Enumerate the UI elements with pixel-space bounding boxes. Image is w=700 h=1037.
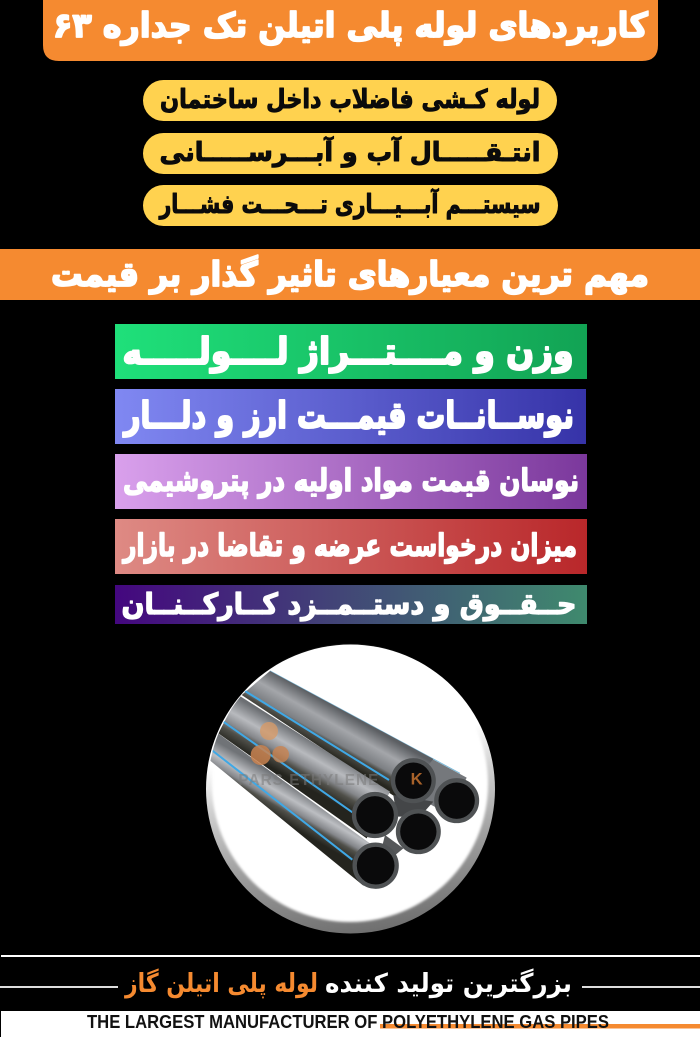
pipes bundle — [209, 671, 477, 887]
watermark — [238, 722, 423, 789]
title banner — [43, 0, 658, 61]
footer left rule — [0, 986, 118, 988]
pill: water transfer and supply: انتـقـــــال آب و آبـــرســـــانی — [160, 136, 540, 168]
pill: pressurized irrigation — [143, 185, 558, 226]
bar: market supply and demand — [115, 519, 587, 574]
pipe photo circle — [206, 644, 495, 934]
pipe ends — [354, 760, 477, 887]
pill: building sewage piping: لوله کـشی فاضلاب داخل ساختمان — [160, 85, 540, 115]
bar: raw material price: نوسان قیمت مواد اولیه در پتروشیمی — [123, 463, 579, 499]
watermark: PARS ETHYLENE — [238, 772, 378, 789]
bar: pipe weight and length: وزن و مــــتـــراژ لــــولـــــه — [122, 330, 574, 373]
pill: pressurized irrigation: سیستـــم آبـــیـــاری تـــحـــت فشـــار — [158, 188, 540, 220]
footer Persian slogan — [123, 968, 572, 999]
footer Persian slogan: لوله پلی اتیلن گاز — [123, 968, 318, 999]
footer English strip — [1, 1011, 700, 1037]
bar: currency fluctuations: نوســانــات قیمـــت ارز و دلـــار — [122, 394, 574, 437]
pill: water transfer and supply — [143, 133, 558, 174]
title banner: کاربردهای لوله پلی اتیلن تک جداره ۶۳ — [53, 6, 648, 46]
pill: building sewage piping — [143, 80, 557, 121]
footer top rule — [1, 955, 700, 957]
section heading band: مهم ترین معیارهای تاثیر گذار بر قیمت — [51, 255, 649, 295]
footer Persian slogan: بزرگترین تولید کننده — [325, 968, 572, 999]
footer English strip: THE LARGEST MANUFACTURER OF POLYETHYLENE GAS PIPES — [87, 1012, 609, 1032]
bar: raw material price — [115, 454, 587, 509]
footer right rule — [582, 986, 700, 988]
bar: currency fluctuations — [115, 389, 586, 444]
watermark: K — [411, 769, 423, 788]
bar: staff wages: حــقــوق و دستــمــزد کــارکــنــان — [122, 587, 576, 621]
